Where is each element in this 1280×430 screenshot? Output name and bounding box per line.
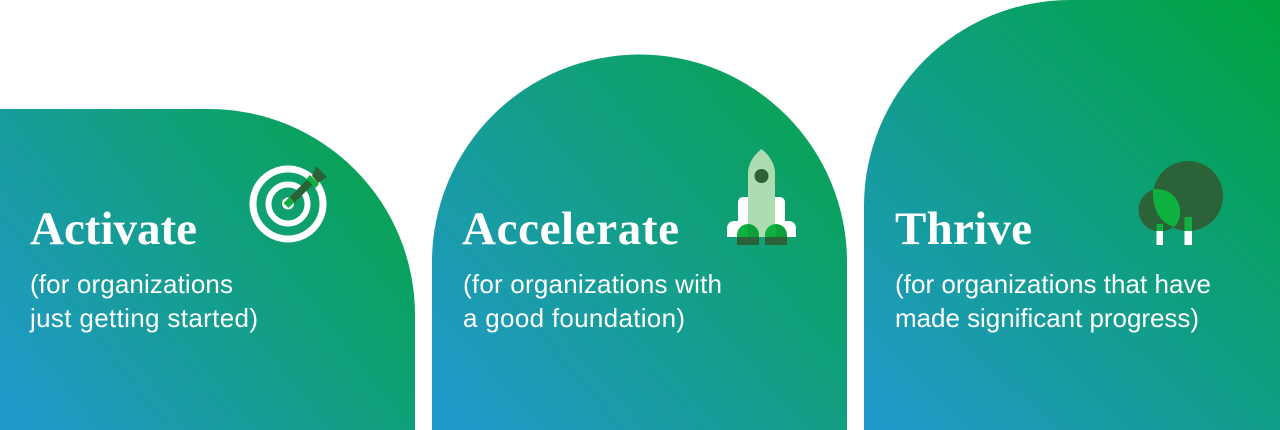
icon: target with dart [253,166,327,239]
text: Accelerate description: (for organizations with [463,269,722,299]
panel: Thrive [864,0,1280,430]
icon: rocket [727,149,796,245]
text: Thrive description [895,269,1211,333]
icon: trees [1138,161,1223,245]
text: Activate description: (for organizations [30,269,233,299]
heading: Activate: Activate [30,203,197,255]
text: Thrive description: (for organizations that have [895,269,1211,299]
heading: Accelerate: Accelerate [462,203,679,255]
panel: Accelerate [432,54,847,430]
text: Activate description [29,269,258,333]
heading: Thrive: Thrive [895,203,1032,255]
panel: Activate [0,109,415,430]
text: Accelerate description [463,269,722,333]
text: Thrive description: made significant progress) [895,303,1199,333]
text: Activate description: just getting started) [29,303,258,333]
text: Accelerate description: a good foundation) [463,303,685,333]
